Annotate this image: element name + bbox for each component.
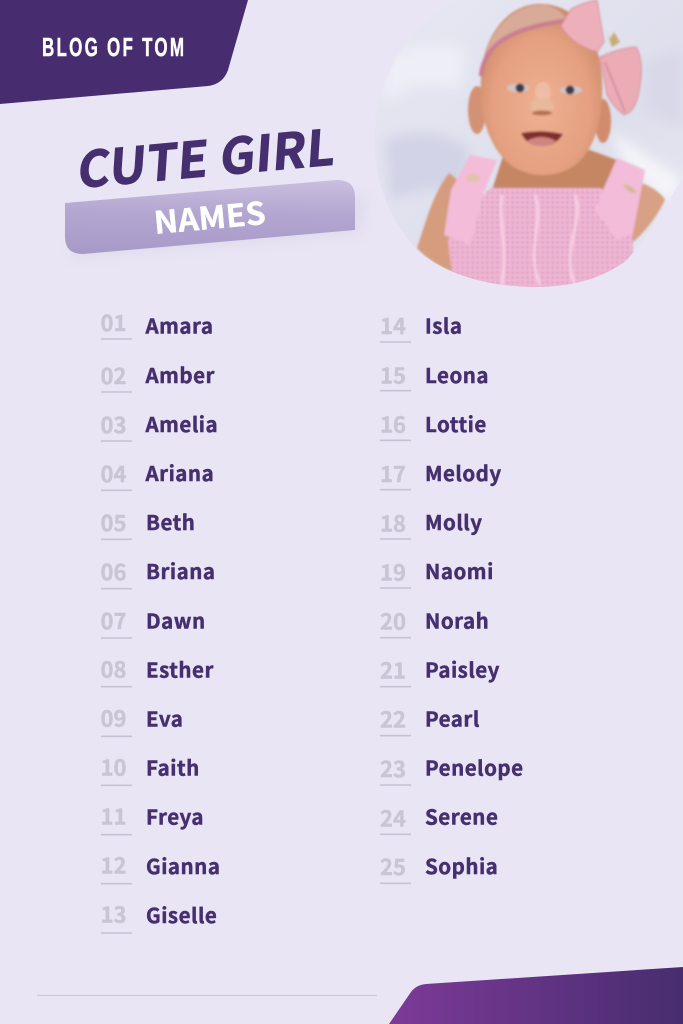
entry 17 — [380, 457, 502, 490]
entry 21 — [380, 653, 500, 687]
entry 05: 05 — [100, 506, 126, 538]
title band: Names — [65, 180, 368, 258]
entry 07 — [100, 604, 206, 638]
entry 17: Melody — [425, 457, 502, 487]
entry 10: 10 — [100, 751, 126, 783]
entry 19: Naomi — [425, 555, 494, 585]
dress — [448, 188, 633, 289]
entry 20 — [380, 604, 489, 638]
entry 13: 13 — [100, 898, 126, 930]
entry 25: Sophia — [425, 850, 498, 880]
entry 15: Leona — [425, 359, 489, 389]
chest — [492, 150, 617, 192]
name list: column one — [100, 306, 220, 933]
eye left — [507, 84, 529, 92]
entry 14: 14 — [380, 309, 406, 341]
entry 21: Paisley — [425, 653, 500, 683]
bow — [561, 0, 604, 52]
entry 18: Molly — [425, 506, 483, 536]
entry 07: Dawn — [146, 604, 206, 634]
title: Cute Girl: CUTE GIRL — [76, 108, 338, 203]
entry 03: 03 — [100, 408, 126, 440]
ears — [468, 86, 486, 134]
entry 11 — [100, 799, 204, 835]
eye right — [560, 86, 582, 94]
entry 24: 24 — [380, 801, 406, 833]
entry 10: Faith — [146, 752, 200, 782]
entry 20: 20 — [380, 604, 406, 636]
entry 09: 09 — [100, 702, 126, 734]
bow crown — [606, 30, 620, 47]
left arm — [416, 172, 458, 272]
mouth — [521, 131, 563, 146]
entry 23: Penelope — [425, 752, 524, 782]
entry 04: Ariana — [144, 457, 214, 487]
entry 03 — [100, 408, 218, 441]
dress left strap — [444, 155, 497, 245]
buttons — [466, 174, 480, 182]
entry 24: Serene — [425, 801, 498, 831]
entry 11: 11 — [100, 799, 126, 831]
nose bridge highlight — [535, 82, 551, 102]
footer accent shape — [389, 967, 683, 1024]
entry 12 — [100, 848, 220, 884]
headband — [481, 21, 565, 76]
entry 06 — [100, 555, 216, 589]
entry 09 — [100, 702, 183, 736]
entry 08 — [100, 652, 214, 687]
entry 18: 18 — [380, 506, 406, 538]
entry 01 — [100, 306, 213, 340]
entry 16 — [380, 408, 487, 440]
entry 23: 23 — [380, 752, 406, 784]
entry 19: 19 — [380, 555, 406, 587]
entry 08: Esther — [146, 653, 214, 683]
entry 01: Amara — [144, 310, 213, 340]
footer rule — [37, 994, 377, 996]
entry 22: 22 — [380, 703, 406, 735]
entry 13: Giselle — [146, 899, 217, 929]
entry 06: 06 — [100, 555, 126, 587]
entry 05 — [100, 506, 195, 539]
entry 22: Pearl — [425, 702, 480, 732]
entry 11: Freya — [146, 801, 204, 831]
entry 23 — [380, 752, 524, 785]
entry 13 — [100, 898, 217, 933]
right arm — [631, 182, 666, 243]
entry 18 — [380, 506, 483, 539]
entry 14: Isla — [425, 310, 462, 340]
nose — [530, 100, 554, 112]
entry 06: Briana — [146, 555, 216, 585]
dress right strap — [595, 158, 645, 240]
entry 25: 25 — [380, 850, 406, 882]
entry 21: 21 — [380, 653, 406, 685]
photo: smiling baby in pink crochet dress — [370, 0, 683, 290]
entry 17: 17 — [380, 457, 406, 489]
entry 16: 16 — [380, 408, 406, 440]
entry 16: Lottie — [425, 408, 487, 438]
entry 12: Gianna — [146, 850, 220, 880]
entry 07: 07 — [100, 604, 126, 636]
entry 02: 02 — [100, 359, 126, 391]
entry 05: Beth — [146, 506, 195, 536]
entry 09: Eva — [146, 702, 183, 732]
entry 01: 01 — [100, 306, 126, 338]
entry 22 — [380, 702, 480, 736]
entry 25 — [380, 850, 498, 883]
entry 15: 15 — [380, 358, 406, 390]
head — [481, 4, 602, 175]
header banner — [0, 0, 248, 104]
entry 14 — [380, 309, 462, 342]
band label: NAMES — [152, 188, 267, 243]
entry 19 — [380, 555, 494, 588]
entry 08: 08 — [100, 652, 126, 684]
entry 15 — [380, 358, 489, 391]
entry 02 — [100, 359, 215, 392]
entry 02: Amber — [144, 359, 215, 389]
entry 04: 04 — [100, 457, 126, 489]
forehead above headband — [486, 4, 566, 52]
entry 24 — [380, 801, 498, 834]
entry 10 — [100, 751, 200, 785]
brand name: BLOG OF TOM — [42, 32, 186, 62]
name list: column two — [380, 309, 524, 883]
entry 12: 12 — [100, 848, 126, 880]
entry 04 — [100, 457, 214, 490]
entry 20: Norah — [425, 604, 489, 634]
entry 03: Amelia — [144, 408, 218, 438]
dress cable stitching — [501, 195, 577, 285]
